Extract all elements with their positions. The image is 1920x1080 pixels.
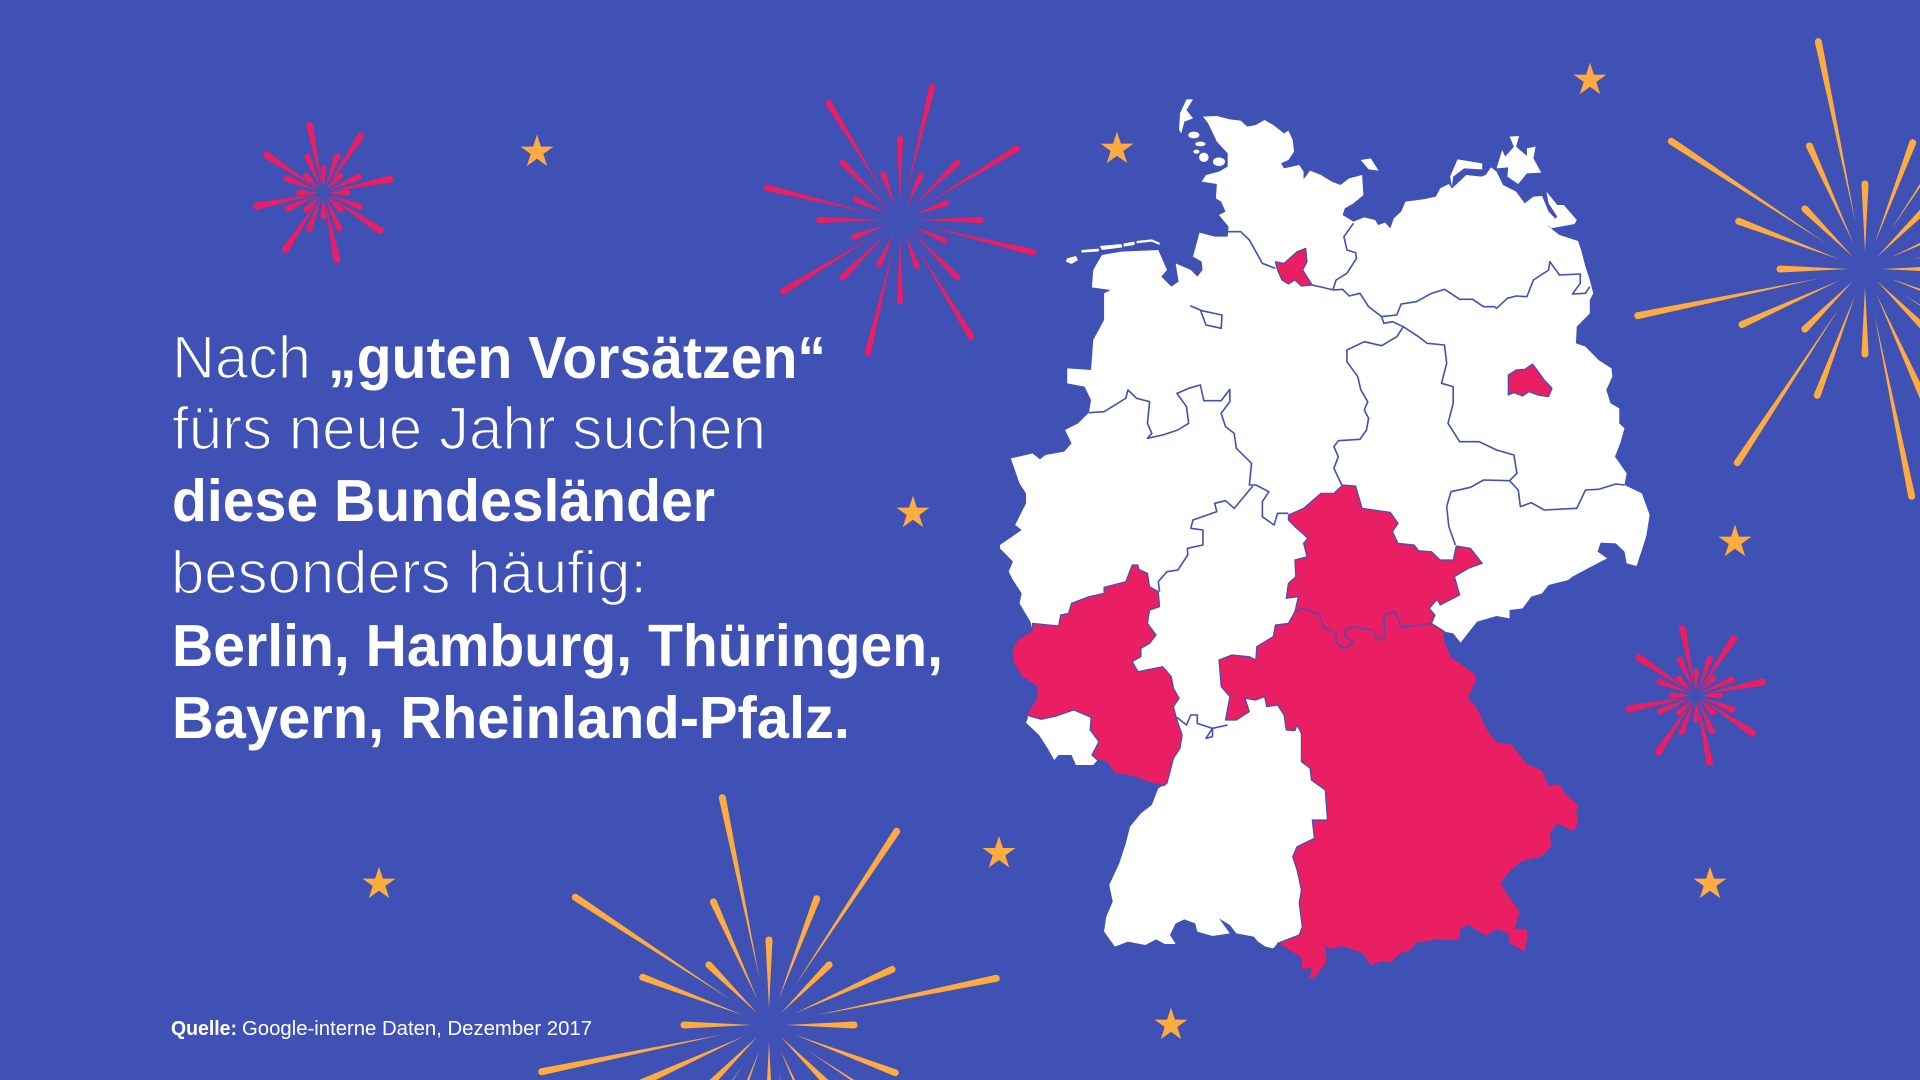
map: Hamburg xyxy=(1275,248,1312,286)
headline line 6: Bayern, Rheinland-Pfalz. xyxy=(172,685,850,751)
star 4 xyxy=(896,496,930,527)
firework: large pink top centre xyxy=(763,83,1037,357)
map: Thüringen xyxy=(1286,485,1482,648)
firework: large orange bottom xyxy=(538,794,1000,1080)
map: Berlin xyxy=(1508,364,1552,397)
headline xyxy=(171,324,943,751)
headline line 4: besonders häufig: xyxy=(171,539,647,606)
map: islands xyxy=(1066,99,1577,264)
map: white land outline xyxy=(1000,116,1650,980)
source note: Quelle: xyxy=(171,1018,237,1040)
headline line 3: diese Bundesländer xyxy=(172,468,715,534)
map of Germany xyxy=(1000,99,1650,980)
headline line 2: fürs neue Jahr suchen xyxy=(172,395,766,462)
star 5 xyxy=(1718,525,1752,556)
star 7 xyxy=(362,867,396,898)
headline line 1: Nach xyxy=(172,324,311,391)
firework: large orange top right xyxy=(1634,38,1920,500)
headline line 5: Berlin, Hamburg, Thüringen, xyxy=(172,613,943,679)
source note: Google-interne Daten, Dezember 2017 xyxy=(242,1018,592,1040)
star 1 xyxy=(520,135,554,166)
map: state borders xyxy=(1089,223,1624,738)
star 8 xyxy=(1694,867,1726,898)
headline line 1: „guten Vorsätzen“ xyxy=(328,325,826,391)
star 9 xyxy=(1154,1008,1188,1039)
star 6 xyxy=(982,836,1016,868)
star 2 xyxy=(1100,132,1134,163)
map: Rheinland-Pfalz xyxy=(1012,565,1182,786)
map: Bayern xyxy=(1219,608,1579,980)
firework: small pink top left xyxy=(252,122,394,264)
firework: small pink right xyxy=(1625,625,1767,766)
star 3 xyxy=(1574,63,1606,94)
stars xyxy=(362,63,1752,1039)
